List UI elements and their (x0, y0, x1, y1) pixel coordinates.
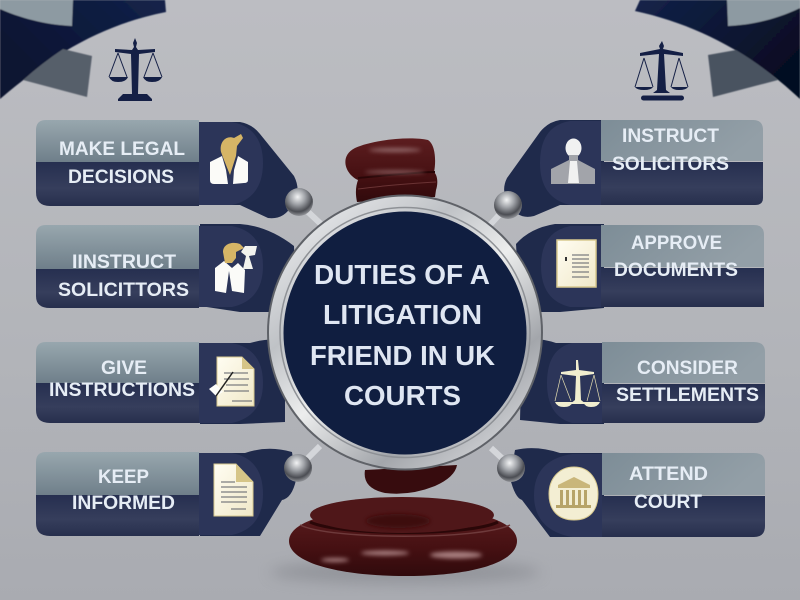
icon: person in suit (551, 138, 595, 184)
panel: attend court (534, 453, 765, 537)
block lower tier (289, 508, 517, 576)
label line 2: SOLICITORS (612, 154, 729, 175)
icon: scales of justice, right (635, 41, 688, 100)
label: IINSTRUCT (72, 252, 176, 273)
icon: scales (555, 360, 600, 407)
label line 2: COURT (634, 492, 702, 513)
label line 2: INFORMED (72, 493, 175, 514)
title: LITIGATION (323, 299, 482, 330)
title (310, 259, 495, 411)
icon: document with pen (209, 357, 254, 406)
arm: bottom left (200, 449, 296, 536)
panel: consider settlements (547, 342, 765, 423)
arm: second left (200, 224, 296, 312)
icon: document (557, 240, 596, 287)
gavel highlights (365, 148, 425, 174)
arm: third left (200, 339, 285, 424)
knob: bottom right (497, 454, 525, 482)
navy disc (284, 212, 526, 454)
label: GIVE (101, 358, 147, 379)
block upper tier (310, 497, 494, 533)
panel: instruct solicitors right (540, 120, 763, 205)
title: COURTS (344, 380, 461, 411)
arm: top left (200, 122, 298, 218)
central magnifier ring (267, 194, 543, 470)
gavel head lower part (365, 465, 457, 494)
label: MAKE LEGAL (59, 139, 185, 160)
gavel head (345, 138, 437, 202)
icon: document (214, 464, 253, 516)
panel: give instructions (36, 342, 263, 423)
corner decoration: top right (635, 0, 800, 99)
label: APPROVE (631, 233, 722, 254)
gavel sound block (289, 497, 517, 576)
label: ATTEND (629, 464, 708, 485)
knob: top left (285, 188, 313, 216)
panel: make legal decisions (36, 120, 263, 206)
title: DUTIES OF A (314, 259, 490, 290)
icon: person with microphone (215, 243, 257, 293)
arm: second right (516, 224, 604, 312)
corner decoration: top left (0, 0, 166, 99)
knob: top right (494, 191, 522, 219)
base shadow (270, 560, 540, 584)
panel: approve documents (541, 225, 764, 307)
block highlights (321, 550, 482, 562)
title: FRIEND IN UK (310, 340, 495, 371)
label: CONSIDER (637, 358, 738, 379)
panel: keep informed (36, 452, 263, 536)
panel: instruct solicitors left (36, 225, 263, 308)
label: INSTRUCT (622, 126, 719, 147)
arm: top right (504, 120, 604, 217)
label line 2: SOLICITTORS (58, 280, 189, 301)
icon: courthouse badge (549, 467, 598, 520)
arm: third right (520, 339, 604, 424)
label line 2: DOCUMENTS (614, 260, 738, 281)
label line 2: SETTLEMENTS (616, 385, 759, 406)
label line 2: DECISIONS (68, 167, 174, 188)
icon: scales of justice, left (109, 38, 162, 101)
icon: person in white jacket (210, 134, 248, 184)
arms and knobs (200, 120, 604, 537)
knob stems (305, 210, 505, 461)
arm: bottom right (510, 448, 604, 537)
label line 2: INSTRUCTIONS (49, 380, 195, 401)
knob: bottom left (284, 454, 312, 482)
label: KEEP (98, 467, 149, 488)
